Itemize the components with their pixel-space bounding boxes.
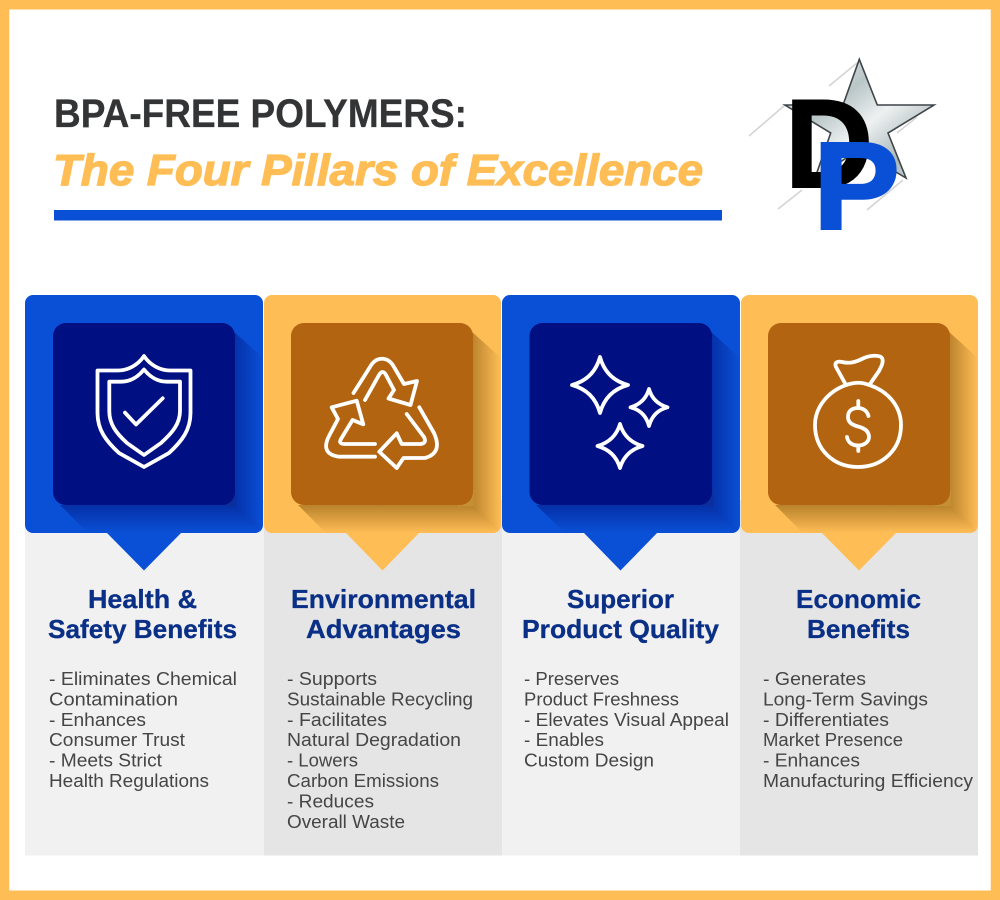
icon: sparkles bbox=[572, 357, 668, 468]
benefits list: - Lowers bbox=[287, 751, 358, 771]
benefits list: - Differentiates bbox=[763, 710, 889, 730]
panel: economic benefits bbox=[740, 295, 978, 856]
benefits list: Custom Design bbox=[524, 751, 654, 771]
heading: Environmental bbox=[291, 584, 476, 614]
icon tile bbox=[768, 323, 950, 505]
panel: environmental advantages bbox=[264, 295, 502, 856]
benefits list: - Meets Strict bbox=[49, 751, 162, 771]
column background bbox=[25, 500, 264, 856]
header block bbox=[502, 295, 740, 570]
panel: product quality bbox=[502, 295, 741, 856]
benefits list: - Facilitates bbox=[287, 710, 387, 730]
benefits list bbox=[524, 669, 729, 771]
benefits list: - Elevates Visual Appeal bbox=[524, 710, 729, 730]
benefits list: Health Regulations bbox=[49, 771, 209, 791]
benefits list: Overall Waste bbox=[287, 812, 405, 832]
benefits list: - Preserves bbox=[524, 669, 619, 689]
heading: Superior bbox=[567, 584, 674, 614]
heading bbox=[48, 584, 237, 644]
benefits list bbox=[287, 669, 473, 832]
logo: DP star: D bbox=[785, 75, 873, 214]
benefits list: - Reduces bbox=[287, 791, 374, 811]
benefits list: Long-Term Savings bbox=[763, 689, 928, 709]
icon: money bag bbox=[815, 356, 901, 467]
heading bbox=[796, 584, 921, 644]
panel: health and safety bbox=[25, 295, 264, 856]
benefits list: - Eliminates Chemical bbox=[49, 669, 237, 689]
benefits list: - Enables bbox=[524, 730, 604, 750]
heading: BPA-free polymers: BPA-FREE POLYMERS: bbox=[54, 92, 467, 136]
benefits list: Manufacturing Efficiency bbox=[763, 771, 973, 791]
heading bbox=[291, 584, 476, 644]
heading bbox=[522, 584, 720, 644]
title underline bbox=[54, 210, 722, 220]
icon tile bbox=[53, 323, 235, 505]
logo: DP star bbox=[749, 59, 934, 256]
column background bbox=[740, 500, 978, 856]
icon tile bbox=[530, 323, 712, 505]
header block bbox=[741, 295, 978, 570]
title bbox=[53, 92, 703, 195]
benefits list: - Generates bbox=[763, 669, 866, 689]
header block bbox=[264, 295, 501, 570]
heading: Safety Benefits bbox=[48, 614, 237, 644]
subtitle: The Four Pillars of Excellence bbox=[53, 146, 703, 195]
benefits list: Natural Degradation bbox=[287, 730, 461, 750]
benefits list: Carbon Emissions bbox=[287, 771, 439, 791]
column background bbox=[502, 500, 741, 856]
icon: recycling arrows bbox=[326, 359, 437, 468]
column background bbox=[264, 500, 502, 856]
benefits list: Consumer Trust bbox=[49, 730, 185, 750]
benefits list: Sustainable Recycling bbox=[287, 689, 473, 709]
benefits list: - Supports bbox=[287, 669, 377, 689]
heading: Health & bbox=[88, 584, 197, 614]
icon tile bbox=[291, 323, 473, 505]
heading: Product Quality bbox=[522, 614, 720, 644]
heading: Economic bbox=[796, 584, 921, 614]
benefits list bbox=[49, 669, 237, 791]
benefits list: Market Presence bbox=[763, 730, 903, 750]
benefits list: Product Freshness bbox=[524, 689, 679, 709]
logo: DP star: P bbox=[813, 117, 900, 256]
benefits list: - Enhances bbox=[49, 710, 146, 730]
benefits list: - Enhances bbox=[763, 751, 860, 771]
heading: Advantages bbox=[306, 614, 461, 644]
benefits list: Contamination bbox=[49, 689, 178, 709]
icon: shield with check bbox=[98, 356, 190, 467]
header block bbox=[25, 295, 263, 570]
benefits list bbox=[763, 669, 973, 791]
heading: Benefits bbox=[807, 614, 910, 644]
